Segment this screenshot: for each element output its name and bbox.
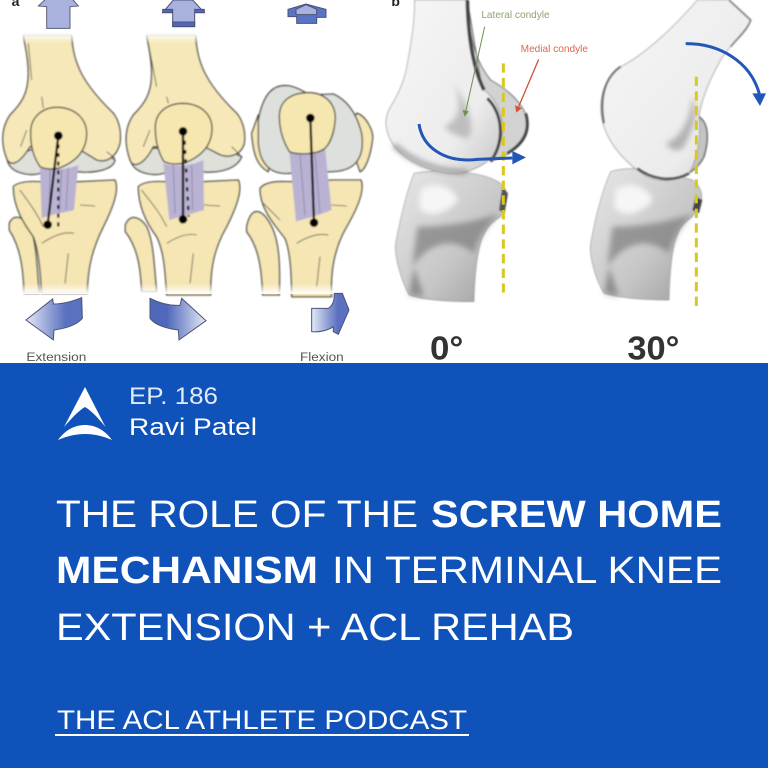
heading: podcast episode title xyxy=(56,494,722,649)
text: episode number: EP. 186 xyxy=(129,383,218,410)
heading: podcast episode title: SCREW HOME xyxy=(431,494,722,536)
heading: podcast episode title: EXTENSION + ACL REHAB xyxy=(56,607,574,649)
panel: blue title band xyxy=(0,363,768,768)
text: guest name: Ravi Patel xyxy=(129,414,257,441)
icon: curved arrow left xyxy=(26,298,82,340)
illustration: knee mid position xyxy=(125,35,245,295)
arrow: medial condyle pointer xyxy=(515,59,539,113)
icon: up arrow medium xyxy=(163,0,204,27)
label: 0 degrees: 0° xyxy=(430,330,463,367)
panel: knee ligament anatomy diagram a xyxy=(0,0,384,364)
guide line: 30 degrees xyxy=(692,77,701,310)
arrow: rotation at 30 degrees xyxy=(686,44,766,106)
arrow: lateral condyle pointer xyxy=(463,27,485,117)
icon: curved arrow right xyxy=(150,298,206,340)
icon: podcast logo xyxy=(58,387,112,440)
text: podcast name: THE ACL ATHLETE PODCAST xyxy=(57,705,467,735)
icon: curved arrow flexion xyxy=(312,293,349,334)
heading: podcast episode title: MECHANISM xyxy=(56,550,318,592)
illustration: knee in extension xyxy=(3,35,120,293)
label: extension: Extension xyxy=(26,350,86,364)
label: lateral condyle: Lateral condyle xyxy=(481,10,550,21)
icon: up arrow small xyxy=(288,4,326,23)
label: 30 degrees: 30° xyxy=(627,330,679,367)
panel: femur rotation diagram b xyxy=(386,0,766,367)
illustration: knee bones at 30 degrees xyxy=(590,0,751,300)
arrow: rotation at 0 degrees xyxy=(419,124,526,164)
heading: podcast episode title: THE ROLE OF THE xyxy=(56,494,418,536)
guide line: 0 degrees xyxy=(499,63,508,297)
icon: up arrow large xyxy=(38,0,78,28)
illustration: knee in flexion xyxy=(247,86,373,297)
heading: podcast episode title: IN TERMINAL KNEE xyxy=(332,550,722,592)
label: medial condyle: Medial condyle xyxy=(521,44,588,55)
illustration: knee bones at 0 degrees xyxy=(386,0,528,302)
label: flexion: Flexion xyxy=(300,350,344,364)
